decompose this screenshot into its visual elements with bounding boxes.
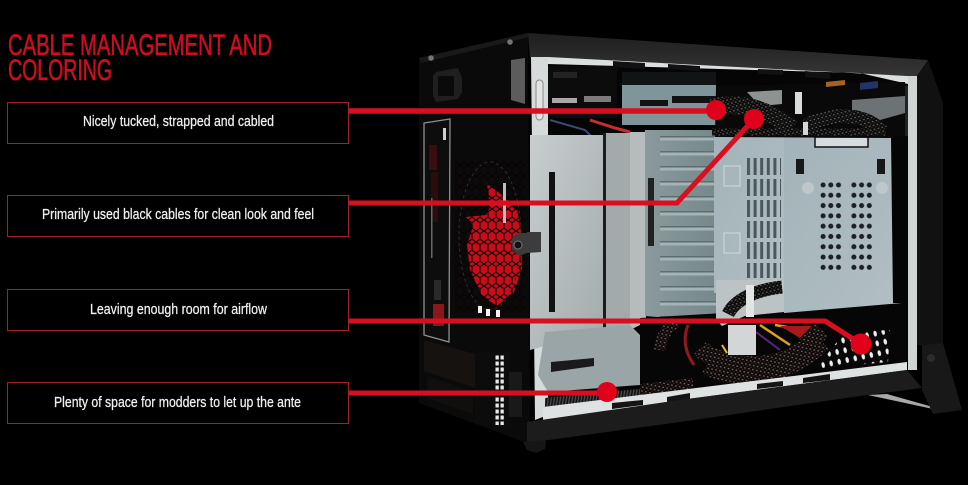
vent holes, lower right: [821, 330, 890, 368]
case left side panel: [419, 33, 530, 443]
lower cable bundle: [660, 322, 825, 379]
leader line 1: [349, 100, 726, 120]
silver tab: [511, 58, 525, 104]
top drive bay, left: [548, 66, 617, 118]
top black sleeved cables: [712, 80, 908, 138]
IO shield: [424, 119, 450, 342]
bottom frame: [527, 370, 922, 443]
leader line 3: [349, 321, 872, 354]
bottom white strip with vents: [543, 362, 907, 421]
large silver side panel: [530, 132, 646, 350]
leader line 2: [349, 109, 764, 203]
interior backdrop: [531, 57, 908, 420]
title: COLORING: [8, 54, 112, 87]
bottom rail comb: [545, 378, 693, 412]
callout 1: tucked cables: [8, 102, 348, 144]
callout 4: modders: [8, 382, 348, 424]
fan with red blades: [455, 160, 525, 317]
case stand, right: [868, 343, 962, 414]
right drive cage with holes: [784, 137, 902, 313]
callout 2: black cables: Primarily used black cables for clean look and feel: [42, 206, 314, 223]
central louvred panel: [645, 130, 717, 322]
top white strip with vents: [548, 57, 908, 84]
connector strap: [728, 285, 782, 317]
lower silver floor plate: [538, 325, 640, 392]
expansion slots: [424, 340, 522, 428]
cable tie clip: [512, 232, 541, 256]
case foot, left: [523, 440, 546, 453]
title: [8, 29, 272, 87]
left silver upright: [531, 57, 548, 420]
callout 1: tucked cables: Nicely tucked, strapped and cabled: [83, 113, 274, 130]
product photo: PC case: [419, 33, 962, 453]
cable bay shadow: [640, 302, 905, 400]
title: CABLE MANAGEMENT AND: [8, 29, 272, 62]
top band of case: [528, 33, 928, 76]
top drive bay, right: [622, 72, 716, 125]
power socket: [433, 68, 462, 102]
right side frame: [917, 60, 943, 345]
middle drive cage: [714, 137, 784, 326]
callout 4: modders: Plenty of space for modders to let up the ante: [54, 394, 301, 411]
callout 2: black cables: [8, 196, 348, 236]
callout 3: airflow: [8, 290, 348, 330]
right silver upright: [908, 76, 917, 370]
callout 3: airflow: Leaving enough room for airflow: [90, 301, 267, 318]
small loose cables: [550, 120, 630, 169]
leader line 4: [349, 382, 617, 402]
